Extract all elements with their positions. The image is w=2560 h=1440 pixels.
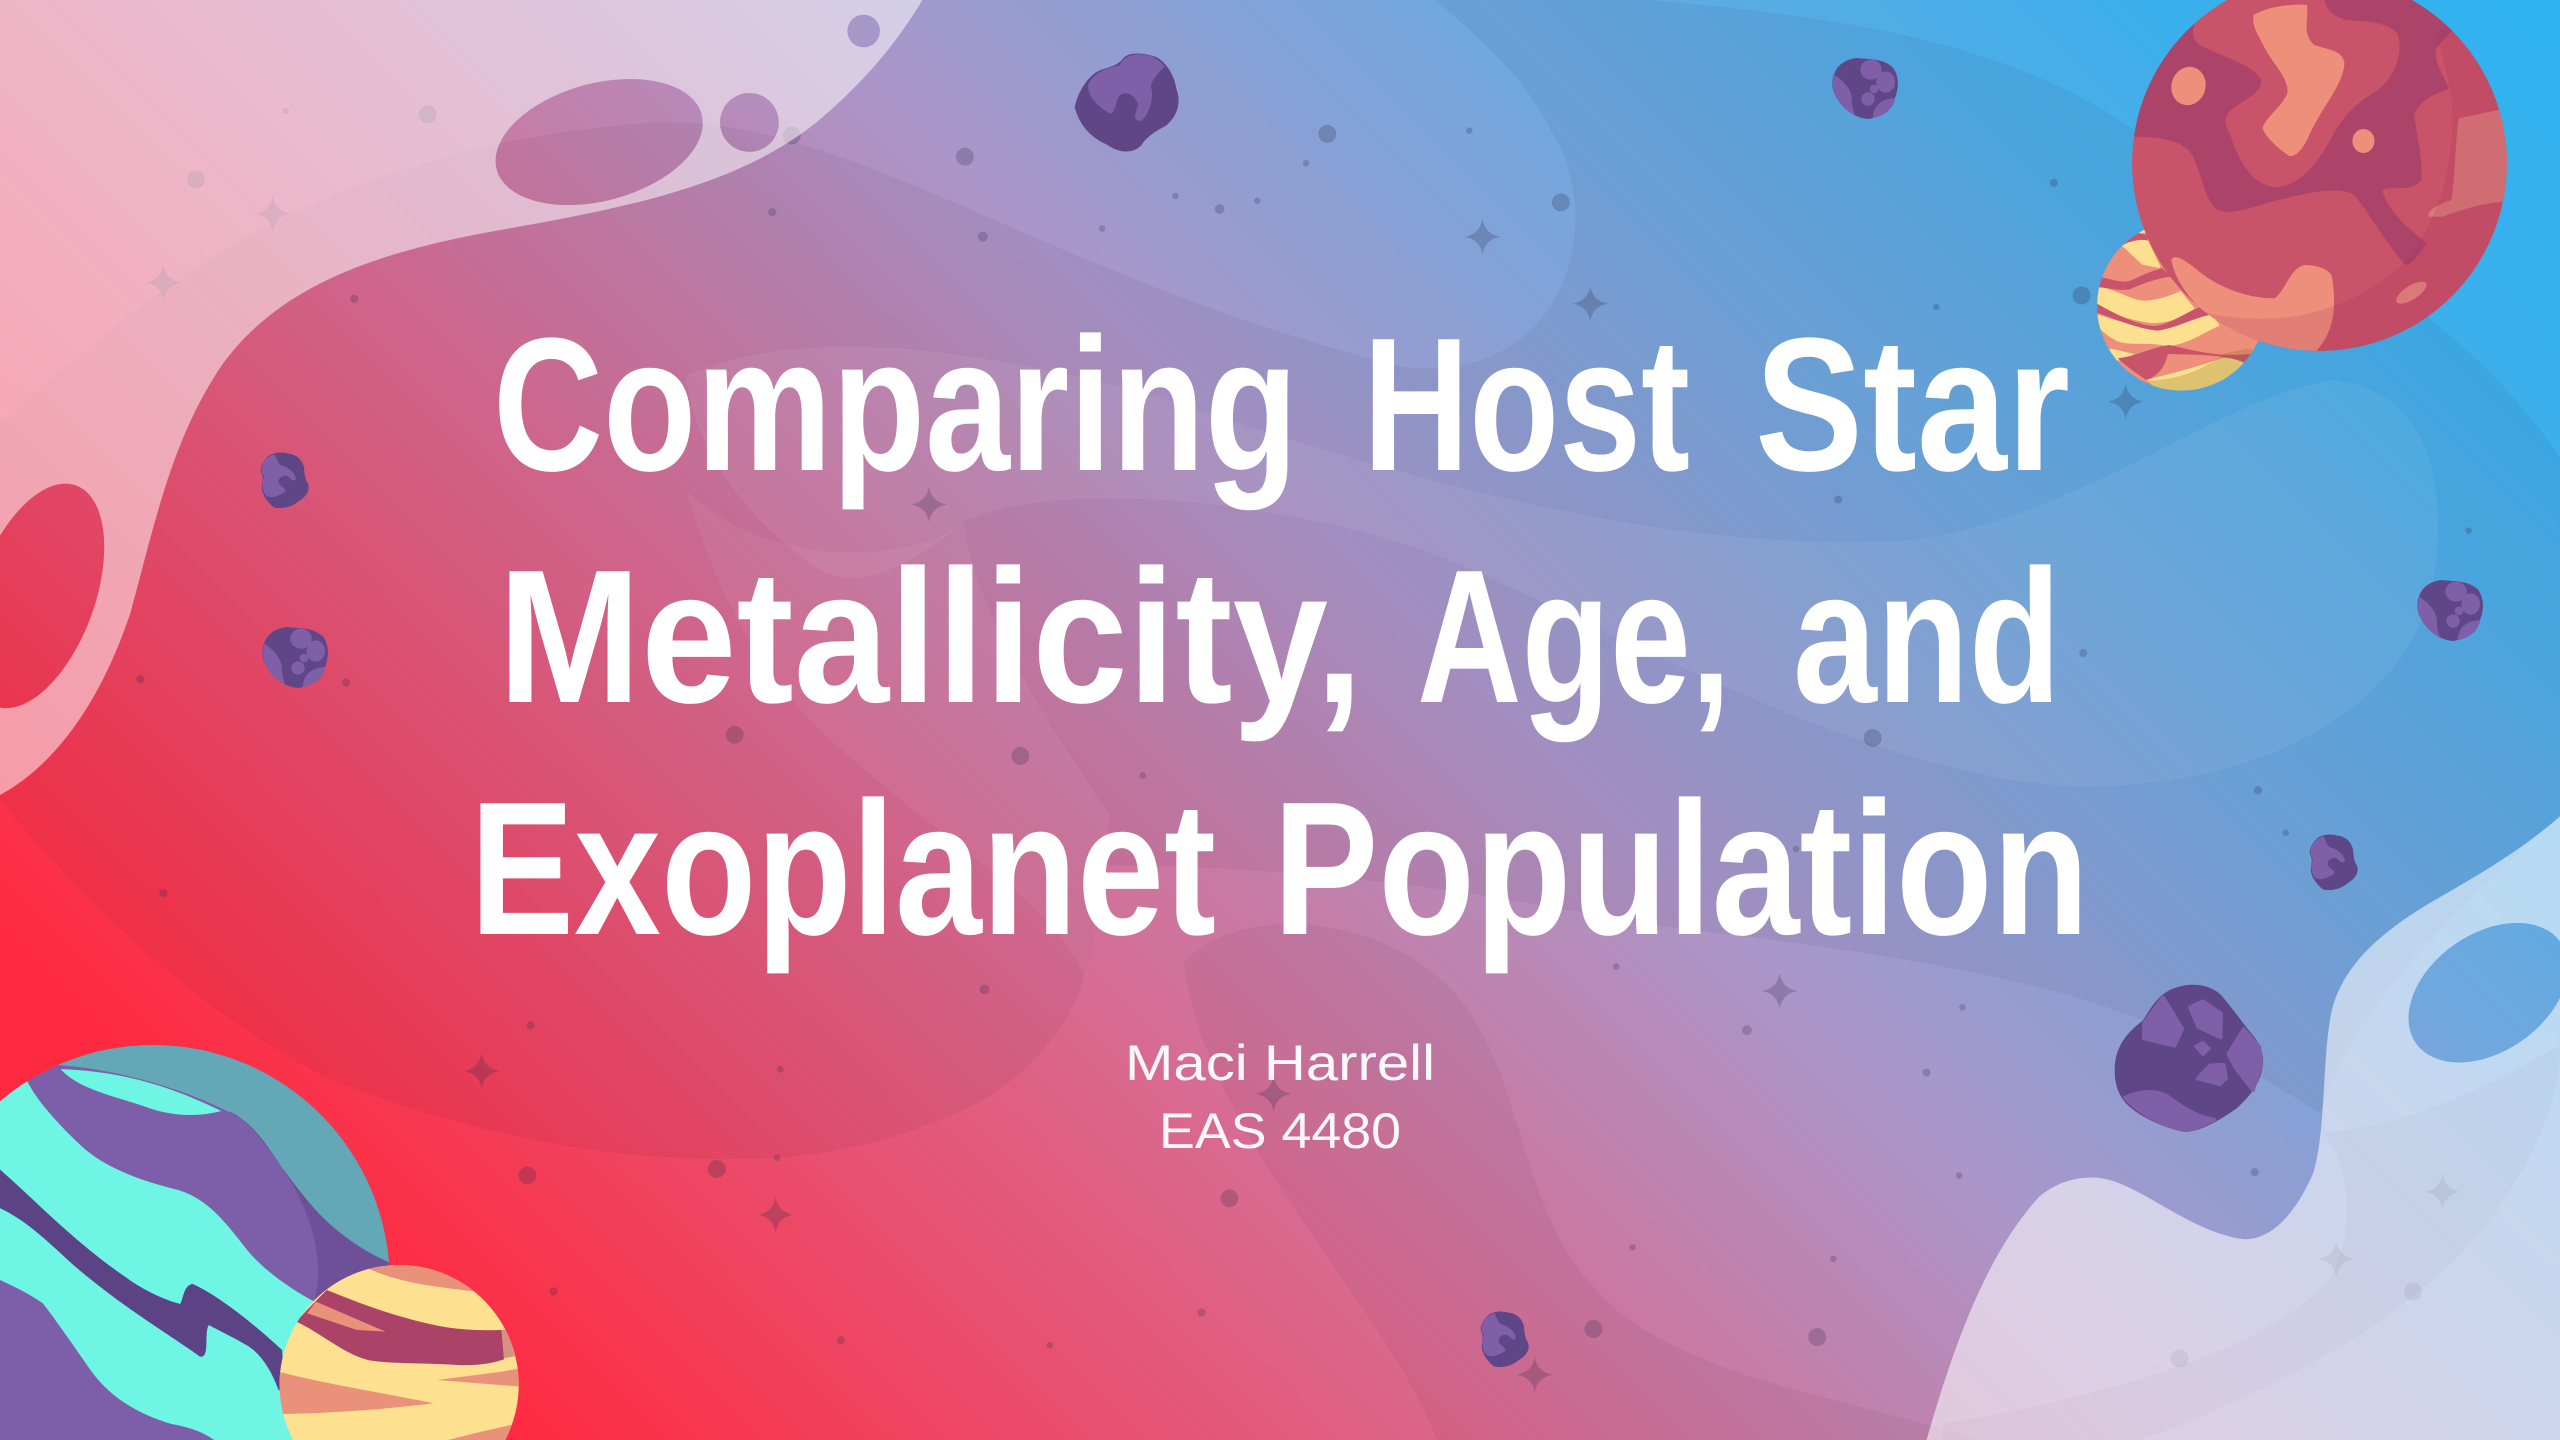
asteroid: right small (2297, 826, 2368, 900)
title line 1: Comparing (493, 299, 1298, 511)
asteroid: top centre (1075, 53, 1179, 151)
asteroid: large bottom right (2115, 985, 2263, 1132)
title line 1: Star (1755, 299, 2070, 511)
author and course (1125, 1035, 1435, 1159)
planet: small striped, top right (2097, 230, 2258, 391)
title line 2: Metallicity, (498, 531, 1363, 743)
title line 2 (498, 531, 2061, 743)
asteroid: right upper (2417, 580, 2483, 641)
title line 3 (470, 763, 2089, 975)
author and course: EAS 4480 (1159, 1103, 1401, 1159)
pale blob: top left (0, 0, 922, 795)
title line 3: Population (1273, 763, 2089, 975)
title line 2: Age, (1417, 531, 1731, 743)
planet: small yellow, bottom left (275, 1260, 525, 1440)
title line 1 (493, 299, 2070, 511)
asteroid: left upper (248, 444, 319, 518)
title line 3: Exoplanet (470, 763, 1216, 975)
asteroid: bottom centre (1468, 1303, 1539, 1377)
planet: large teal and purple, bottom left (0, 1045, 390, 1440)
dark continent (2118, 0, 2464, 265)
asteroid: left lower (262, 627, 328, 688)
light continents (2253, 5, 2345, 156)
planet: large red, top right (2118, 0, 2518, 360)
planet shading (2207, 34, 2507, 351)
title (470, 299, 2089, 975)
pale blob: bottom right (1927, 816, 2560, 1440)
title line 2: and (1793, 531, 2061, 743)
asteroid: top right (1832, 58, 1898, 119)
author and course: Maci Harrell (1125, 1035, 1435, 1091)
title line 1: Host (1363, 299, 1690, 511)
